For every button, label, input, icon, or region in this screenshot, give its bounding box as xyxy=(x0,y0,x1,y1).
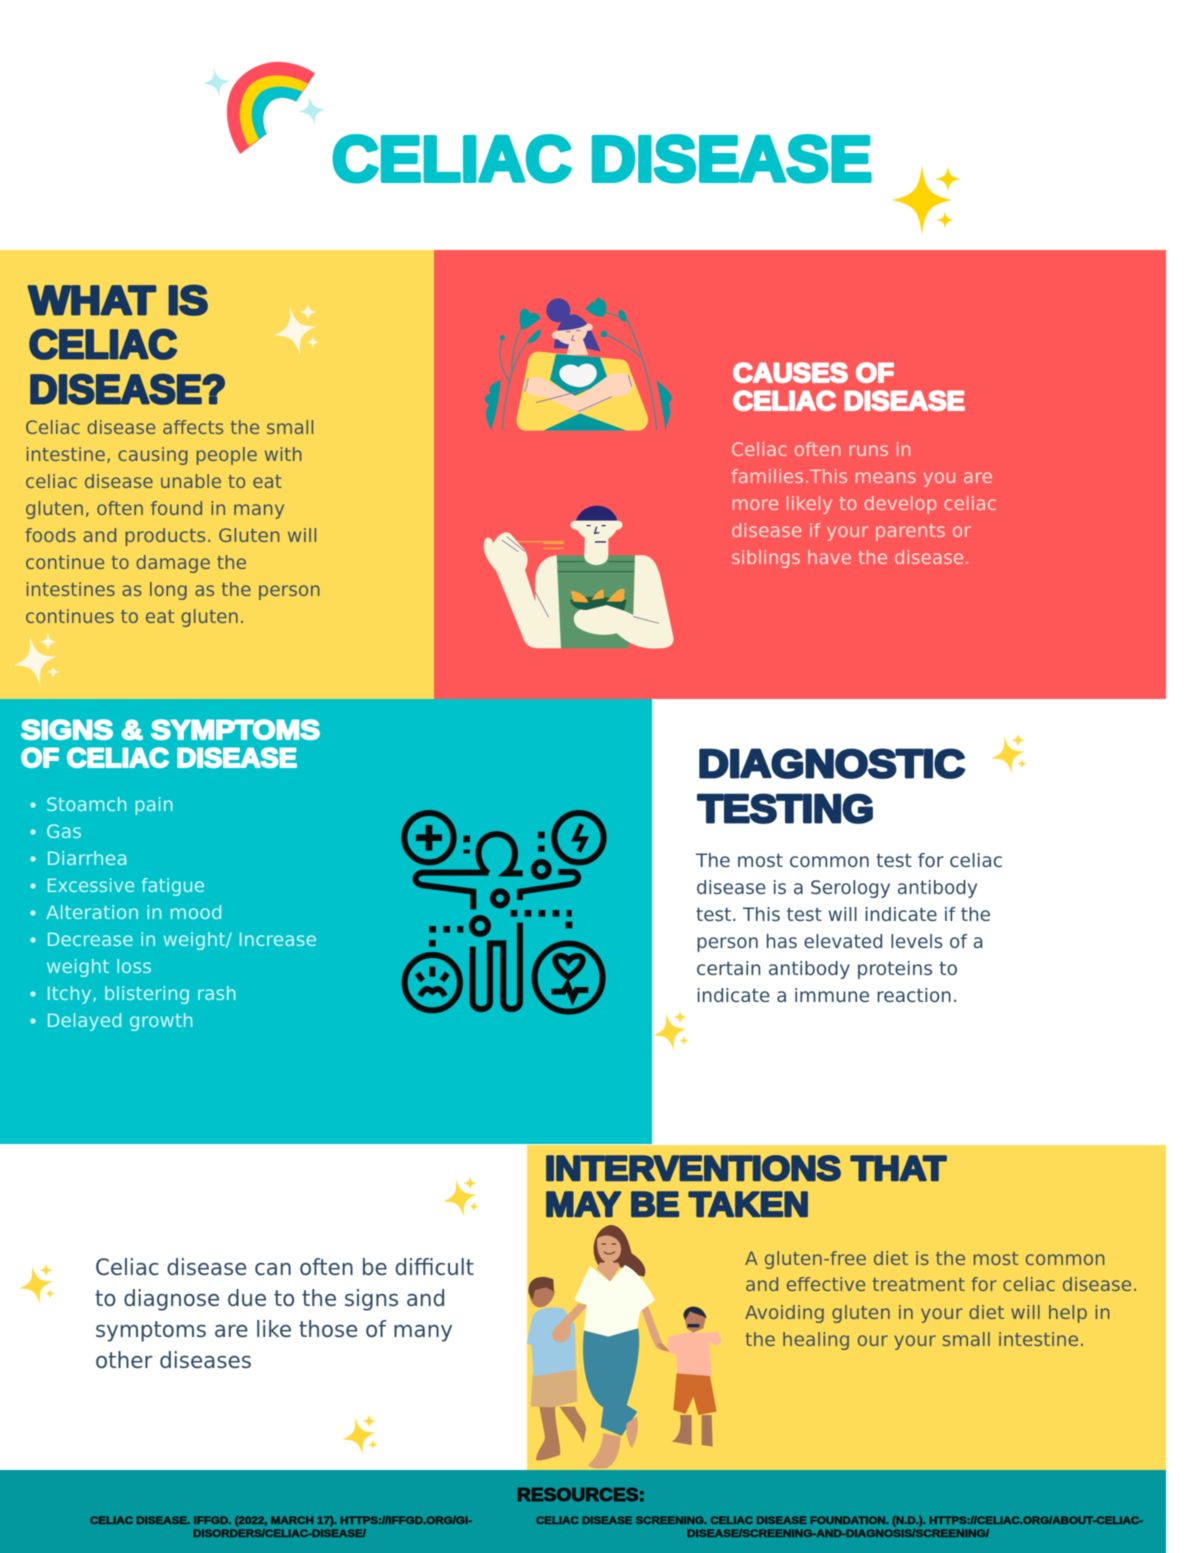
citation: iffgd: DISORDERS/CELIAC-DISEASE/ xyxy=(193,1528,366,1540)
heading: causes of celiac disease: CAUSES OF xyxy=(733,358,894,388)
heading: interventions: MAY BE TAKEN xyxy=(545,1186,809,1224)
text: causes xyxy=(731,439,997,569)
illustration: man eating from a bowl xyxy=(484,506,674,649)
heading: what is celiac disease: CELIAC xyxy=(29,323,177,367)
icon: human body with health symbols xyxy=(404,813,604,1012)
list: symptoms: weight loss xyxy=(46,956,152,978)
text: diagnosis note xyxy=(95,1256,474,1374)
text: diagnostic description: test. This test will indicate if the xyxy=(696,904,991,926)
text: celiac definition: intestine, causing people with xyxy=(25,444,303,466)
list: symptoms: Decrease in weight/ Increase xyxy=(46,929,317,951)
panel: interventions xyxy=(527,1145,1166,1470)
text: celiac definition: Celiac disease affects the small xyxy=(25,417,315,439)
citation: iffgd xyxy=(90,1515,472,1540)
text: gluten free diet xyxy=(745,1248,1138,1351)
panel: difficult to diagnose xyxy=(15,1175,481,1459)
citation: celiac disease foundation xyxy=(536,1515,1143,1540)
text: causes: siblings have the disease. xyxy=(731,547,970,569)
text: celiac definition: foods and products. Gluten will xyxy=(25,525,318,547)
citation: celiac disease foundation: DISEASE/SCREENING-AND-DIAGNOSIS/SCREENING/ xyxy=(687,1528,989,1540)
text: diagnostic description: indicate a immune reaction. xyxy=(696,985,958,1007)
heading: diagnostic testing xyxy=(698,743,965,831)
text: diagnostic description: disease is a Serology antibody xyxy=(696,877,978,899)
text: gluten free diet: and effective treatment for celiac disease. xyxy=(745,1274,1138,1296)
panel: signs and symptoms xyxy=(0,699,652,1144)
text: diagnostic description: The most common test for celiac xyxy=(695,850,1003,872)
icon: sparkles top xyxy=(987,732,1029,778)
heading: resources: RESOURCES: xyxy=(517,1485,645,1505)
list: symptoms: Alteration in mood xyxy=(46,902,223,924)
list: symptoms: Delayed growth xyxy=(46,1010,194,1032)
text: causes: families.This means you are xyxy=(731,466,993,488)
text: diagnostic description: certain antibody proteins to xyxy=(696,958,958,980)
heading: what is celiac disease xyxy=(29,279,226,412)
text: celiac definition: gluten, often found in many xyxy=(25,498,285,520)
text: diagnostic description: person has elevated levels of a xyxy=(696,931,984,953)
heading: signs and symptoms xyxy=(21,715,320,773)
text: diagnosis note: symptoms are like those of many xyxy=(95,1318,453,1343)
icon: sparkles bottom xyxy=(8,632,62,690)
heading: diagnostic testing: TESTING xyxy=(698,788,874,831)
text: causes: Celiac often runs in xyxy=(731,439,912,461)
text: celiac definition: intestines as long as the person xyxy=(25,579,321,601)
heading: signs and symptoms: SIGNS & SYMPTOMS xyxy=(21,715,320,745)
heading: causes of celiac disease: CELIAC DISEASE xyxy=(733,386,965,416)
heading: diagnostic testing: DIAGNOSTIC xyxy=(698,743,965,786)
icon: sparkles bottom xyxy=(649,1009,691,1055)
icon: gold sparkles xyxy=(892,165,961,235)
text: diagnosis note: to diagnose due to the signs and xyxy=(95,1287,446,1312)
heading: causes of celiac disease xyxy=(733,358,965,416)
list: symptoms xyxy=(30,794,317,1032)
heading: interventions: INTERVENTIONS THAT xyxy=(545,1150,946,1188)
heading: interventions xyxy=(545,1150,946,1224)
text: causes: disease if your parents or xyxy=(731,520,971,542)
list: symptoms: Itchy, blistering rash xyxy=(46,983,237,1005)
text: gluten free diet: Avoiding gluten in your diet will help in xyxy=(745,1302,1111,1324)
citation: celiac disease foundation: CELIAC DISEASE SCREENING. CELIAC DISEASE FOUNDATION. (N.D.). HTTPS://CELIAC.ORG/ABOUT-CELIAC- xyxy=(536,1515,1143,1527)
panel: resources xyxy=(0,1470,1166,1553)
text: celiac definition xyxy=(25,417,321,628)
icon: sparkles xyxy=(15,1175,481,1459)
heading: what is celiac disease: DISEASE? xyxy=(29,368,226,412)
text: diagnosis note: Celiac disease can often be difficult xyxy=(95,1256,474,1281)
panel: causes of celiac disease xyxy=(434,250,1166,699)
text: celiac definition: celiac disease unable to eat xyxy=(25,471,282,493)
illustration: woman hugging herself xyxy=(485,298,672,431)
panel: what is celiac disease xyxy=(0,250,434,699)
text: celiac definition: continues to eat gluten. xyxy=(25,606,245,628)
text: causes: more likely to develop celiac xyxy=(731,493,997,515)
panel: diagnostic testing xyxy=(695,732,1029,1007)
text: gluten free diet: the healing our your small intestine. xyxy=(745,1329,1085,1351)
list: symptoms: Gas xyxy=(46,821,82,843)
citation: iffgd: CELIAC DISEASE. IFFGD. (2022, MARCH 17). HTTPS://IFFGD.ORG/GI- xyxy=(90,1515,472,1527)
text: gluten free diet: A gluten-free diet is the most common xyxy=(745,1248,1106,1270)
icon: sparkles top xyxy=(268,302,322,360)
heading: signs and symptoms: OF CELIAC DISEASE xyxy=(21,743,297,773)
text: diagnosis note: other diseases xyxy=(95,1349,252,1374)
title: CELIAC DISEASE xyxy=(332,123,872,195)
illustration: family walking xyxy=(527,1225,722,1469)
list: symptoms: Diarrhea xyxy=(46,848,128,870)
text: diagnostic description xyxy=(695,850,1003,1007)
list: symptoms: Stoamch pain xyxy=(46,794,174,816)
list: symptoms: Excessive fatigue xyxy=(46,875,205,897)
icon: rainbow with sparkles xyxy=(200,62,329,154)
text: celiac definition: continue to damage the xyxy=(25,552,247,574)
heading: what is celiac disease: WHAT IS xyxy=(29,279,208,323)
